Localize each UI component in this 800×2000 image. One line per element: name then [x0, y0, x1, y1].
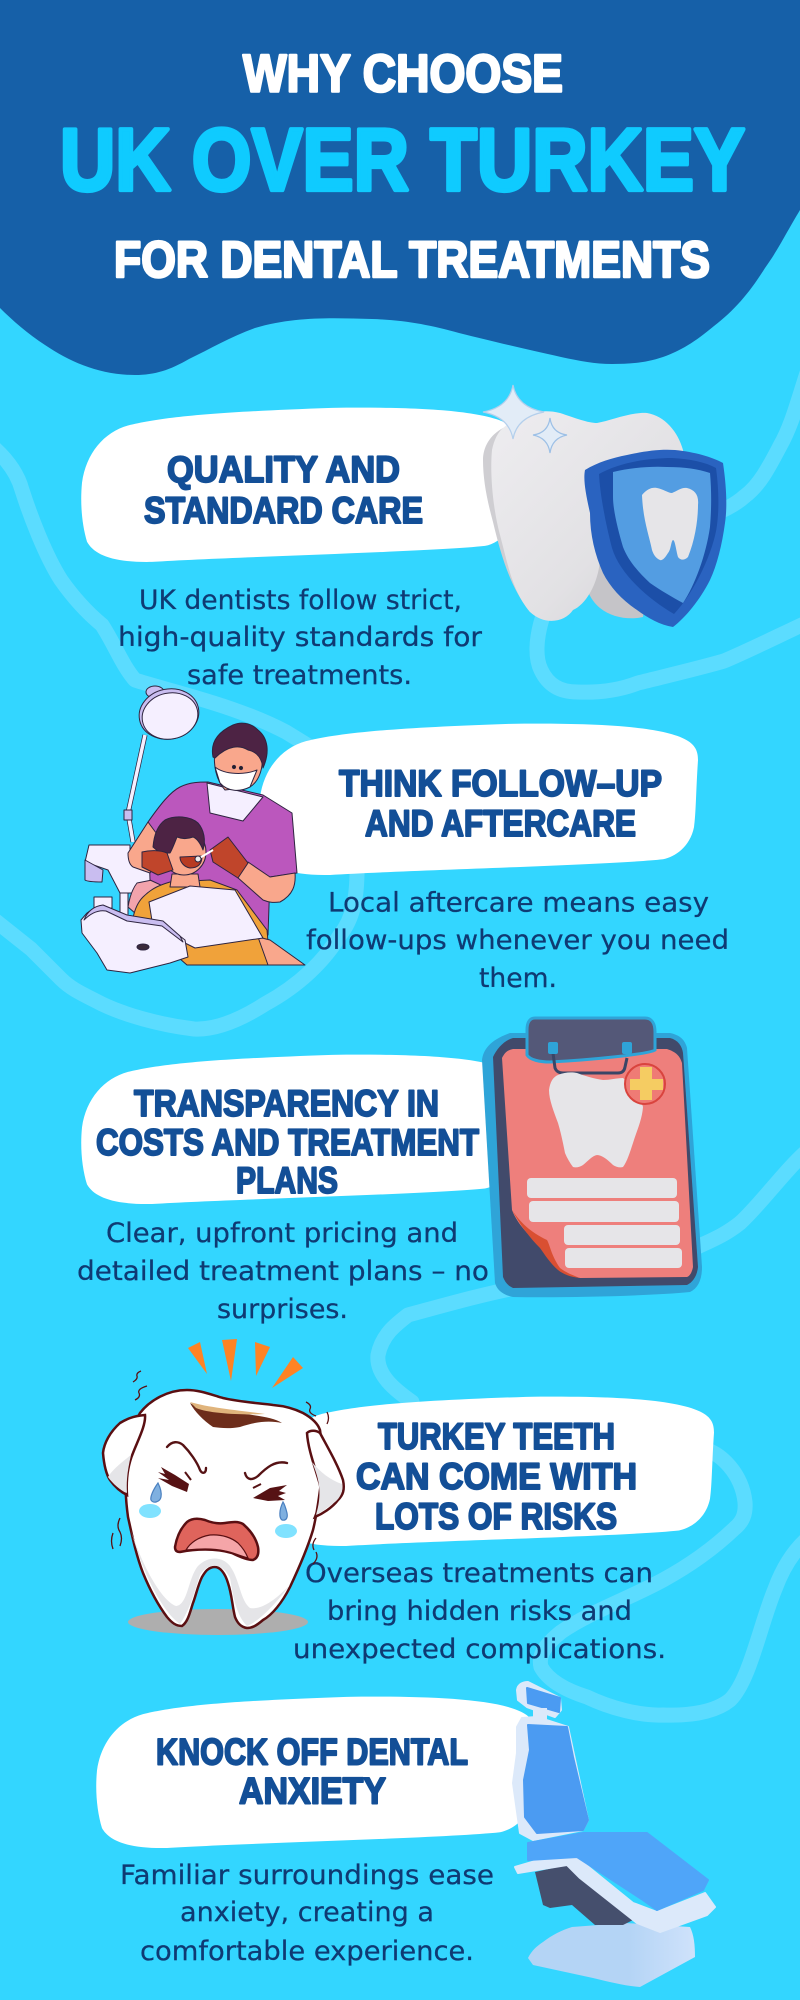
- tears: [151, 1483, 161, 1502]
- text 1: UK dentists follow strict,: [139, 585, 462, 616]
- lamp arm: [128, 735, 145, 842]
- dentist left arm: [128, 822, 165, 873]
- shake marks: [112, 1371, 328, 1564]
- text 2: follow-ups whenever you need: [306, 925, 729, 956]
- panel: think follow-up and aftercare: [81, 683, 729, 994]
- crown and root: [491, 411, 690, 621]
- panel: transparency in costs and treatment plans: [77, 1018, 702, 1325]
- text 3: [77, 1218, 489, 1325]
- heading 3: TRANSPARENCY IN: [134, 1083, 439, 1124]
- text 4: unexpected complications.: [293, 1634, 666, 1665]
- clipboard tooth: [549, 1072, 643, 1167]
- heading 4: CAN COME WITH: [356, 1456, 637, 1497]
- patient clothes: [133, 880, 270, 965]
- medical badge: [625, 1064, 665, 1104]
- gloves: [142, 851, 173, 875]
- text 3: detailed treatment plans – no: [77, 1256, 489, 1287]
- dentist torso: [148, 782, 297, 935]
- back root: [580, 560, 650, 618]
- text 4: [293, 1558, 666, 1665]
- right hand: [307, 1431, 344, 1517]
- icon: crying tooth in pain: [103, 1339, 344, 1635]
- seat: [528, 1833, 708, 1910]
- icon: dental chair: [513, 1682, 715, 1987]
- icon: clipboard with tooth: [482, 1018, 702, 1297]
- text 3: surprises.: [217, 1294, 348, 1325]
- heading 3: COSTS AND TREATMENT: [96, 1122, 479, 1163]
- leg: [258, 937, 305, 965]
- text 4: bring hidden risks and: [327, 1596, 632, 1627]
- heading 1: QUALITY AND: [167, 449, 400, 490]
- panel: turkey teeth can come with lots of risks: [103, 1339, 714, 1665]
- dental mirror: [198, 850, 213, 859]
- brows: [167, 1442, 206, 1473]
- shield: [584, 450, 726, 627]
- text 1: [118, 585, 483, 691]
- text 1: safe treatments.: [187, 660, 412, 691]
- patient head: [162, 829, 206, 875]
- heading 1: STANDARD CARE: [144, 490, 423, 531]
- cheeks: [139, 1504, 161, 1518]
- text 4: Overseas treatments can: [305, 1558, 653, 1589]
- panel: knock off dental anxiety: [96, 1682, 715, 1987]
- tooth shading: [131, 1530, 290, 1626]
- neck: [170, 874, 200, 887]
- heading 2: AND AFTERCARE: [365, 803, 636, 844]
- spittoon tray: [94, 897, 112, 912]
- dentist head: [214, 739, 262, 790]
- bib: [149, 886, 263, 948]
- tooth body: [126, 1390, 322, 1628]
- heading 3: PLANS: [236, 1160, 338, 1201]
- support: [535, 1865, 633, 1925]
- text 5: comfortable experience.: [140, 1936, 474, 1967]
- heading 5: ANXIETY: [239, 1770, 386, 1812]
- clip: [527, 1018, 655, 1062]
- header: dark blue wave panel: [0, 0, 800, 375]
- heading card 2 blob: [259, 724, 698, 875]
- collar: [207, 783, 263, 821]
- shadow: [128, 1609, 308, 1635]
- heading 1: [144, 449, 423, 531]
- title: [60, 44, 745, 288]
- text 5: anxiety, creating a: [180, 1897, 434, 1928]
- left hand: [103, 1415, 145, 1495]
- heading card 5 blob: [96, 1697, 535, 1848]
- heading 5: [156, 1732, 468, 1812]
- headrest: [517, 1682, 561, 1717]
- text 2: Local aftercare means easy: [328, 888, 709, 918]
- heading 4: LOTS OF RISKS: [375, 1496, 617, 1537]
- heading 2: [339, 763, 662, 844]
- mouth: [175, 1519, 258, 1560]
- panel: quality and standard care: [81, 385, 726, 691]
- heading 5: KNOCK OFF DENTAL: [156, 1732, 468, 1772]
- open mouth: [180, 856, 202, 868]
- heading 2: THINK FOLLOW–UP: [339, 763, 662, 804]
- backrest: [513, 1717, 588, 1840]
- text 1: high-quality standards for: [118, 622, 483, 653]
- text 5: [120, 1860, 494, 1967]
- icon: tooth with shield: [483, 385, 726, 627]
- title line: for dental treatments: FOR DENTAL TREATMENTS: [114, 231, 710, 288]
- squeezed eyes: [158, 1467, 189, 1492]
- mouth inner: [186, 1535, 248, 1558]
- base: [528, 1923, 695, 1987]
- text 2: them.: [479, 963, 557, 994]
- text 3: Clear, upfront pricing and: [106, 1218, 458, 1249]
- board: [482, 1033, 702, 1297]
- icon: dentist treating patient: [81, 683, 305, 973]
- dentist right arm: [237, 862, 295, 902]
- face mask: [215, 767, 257, 790]
- text 2: [306, 888, 729, 994]
- heading card 4 blob: [275, 1397, 714, 1546]
- paper: [502, 1049, 693, 1278]
- heading card 3 blob: [81, 1055, 520, 1204]
- decay: [190, 1403, 282, 1428]
- clip wire: [553, 1053, 627, 1073]
- heading 3: [96, 1083, 479, 1201]
- heading card 1 blob: [81, 408, 520, 562]
- heading 4: [356, 1416, 637, 1537]
- pain rays: [188, 1339, 303, 1388]
- title line: why choose: WHY CHOOSE: [243, 44, 563, 104]
- heading 4: TURKEY TEETH: [378, 1416, 615, 1457]
- chair headrest: [85, 845, 165, 893]
- text 5: Familiar surroundings ease: [120, 1860, 494, 1891]
- paper fold: [512, 1210, 580, 1278]
- frame: [515, 1853, 715, 1932]
- text lines: [527, 1178, 677, 1198]
- rear lobe: [483, 428, 560, 612]
- sparkles: [483, 385, 544, 439]
- lamp head: [146, 686, 164, 698]
